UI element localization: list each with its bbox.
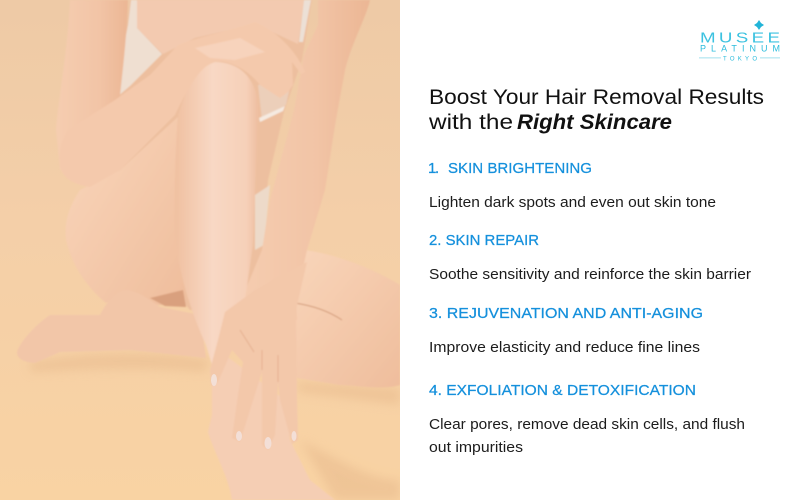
bra (117, 0, 162, 97)
logo subtitle: PLATINUM (700, 44, 780, 54)
right arm (246, 0, 370, 296)
logo tokyo line: TOKYO (723, 56, 757, 62)
photo: seated figure on peach background (0, 0, 400, 500)
lower shin and foot (208, 355, 335, 500)
finger creases (240, 330, 278, 382)
item 3: rejuvenation and anti-aging (429, 305, 703, 356)
title (428, 86, 764, 134)
logo wordmark: MUSEE (700, 29, 780, 46)
fingernails (211, 374, 296, 449)
right thigh (296, 250, 400, 387)
heading 3: 3. REJUVENATION AND ANTI-AGING (429, 305, 703, 322)
logo star (754, 20, 764, 30)
logo: Musee Platinum Tokyo (699, 20, 780, 62)
thigh and hip (66, 115, 185, 305)
heading 1: SKIN BRIGHTENING (448, 160, 592, 177)
forearm over knee (92, 24, 300, 182)
description 4: out impurities (429, 440, 523, 456)
item 1: skin brightening (428, 160, 716, 211)
upper arm left (57, 0, 128, 146)
description 4: Clear pores, remove dead skin cells, and flush (429, 417, 745, 433)
description 4 (429, 417, 745, 456)
hip shadow (150, 290, 186, 307)
floor shadows (30, 353, 400, 500)
back leg (17, 290, 206, 363)
title: Right Skincare (517, 111, 672, 134)
hand on ankle (210, 262, 307, 450)
item 4: exfoliation and detoxification (429, 382, 745, 456)
title: with the (428, 111, 513, 134)
hand highlight (195, 38, 265, 60)
lower garment (255, 185, 270, 250)
description 3: Improve elasticity and reduce fine lines (429, 340, 700, 356)
item 2: skin repair (429, 232, 751, 283)
heading 1: 1. (428, 160, 439, 177)
heading 2: 2. SKIN REPAIR (429, 232, 539, 249)
description 2: Soothe sensitivity and reinforce the skin barrier (429, 267, 751, 283)
title: Boost Your Hair Removal Results (429, 86, 764, 109)
thigh crease (295, 303, 342, 320)
description 1: Lighten dark spots and even out skin tone (429, 195, 716, 211)
heading 4: 4. EXFOLIATION & DETOXIFICATION (429, 382, 696, 399)
raised leg shin (182, 62, 254, 363)
torso (120, 26, 307, 310)
chest highlight (137, 0, 304, 54)
